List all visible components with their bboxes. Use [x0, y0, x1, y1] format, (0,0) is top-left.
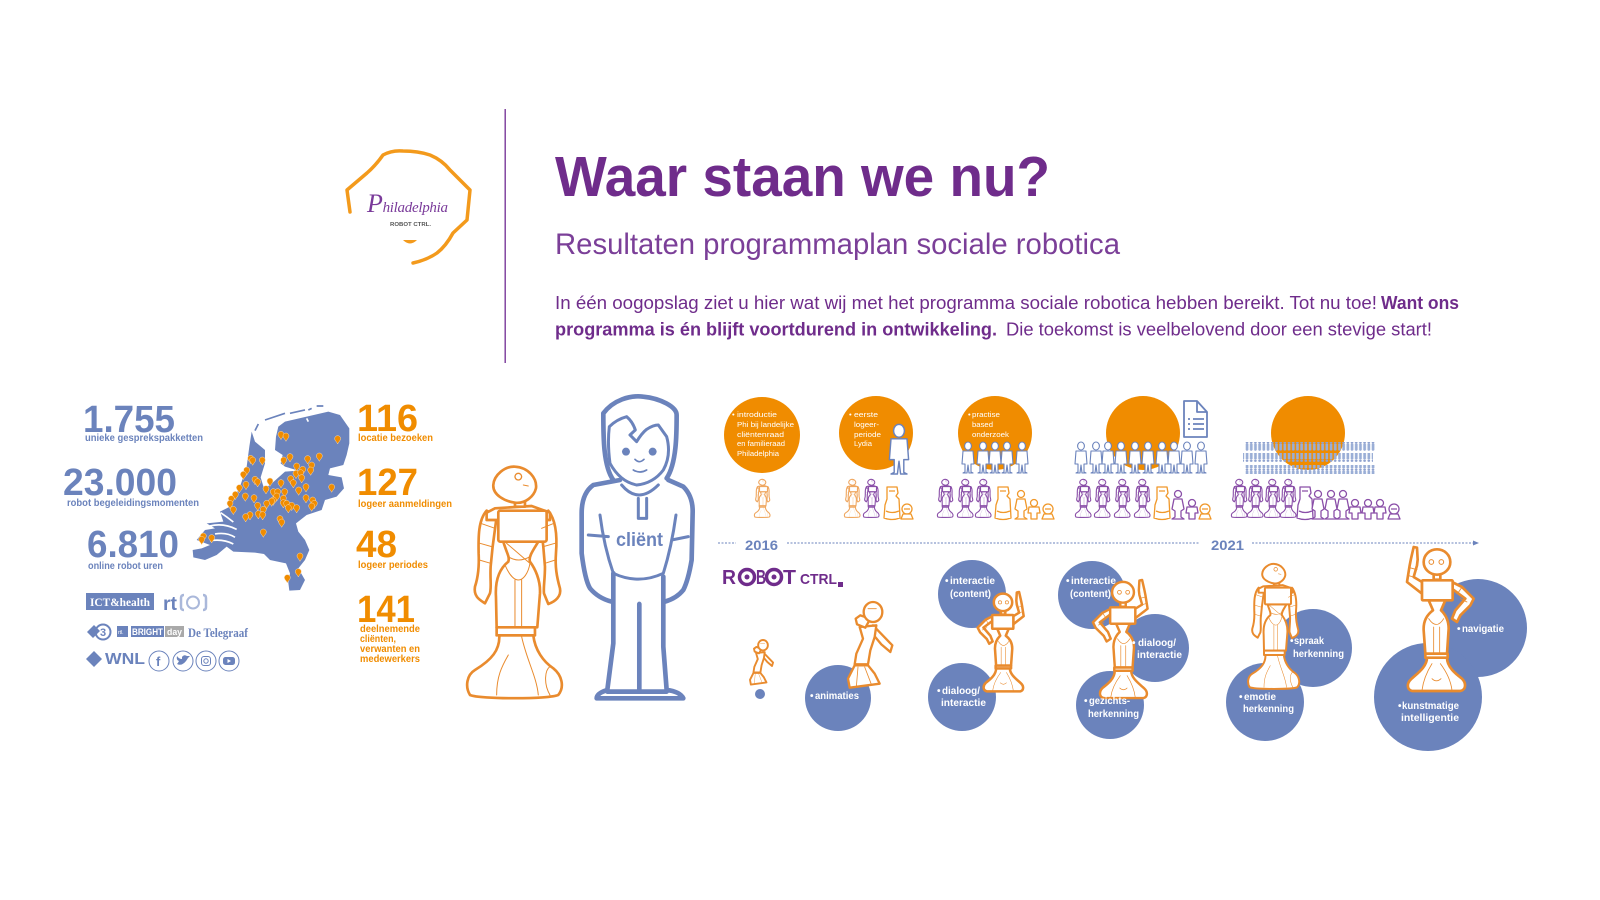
capability stage 5: navigatie en kunstmatige intelligentie: intelligentie: [1401, 713, 1459, 724]
top row: milestone 3: •: [968, 410, 971, 419]
media logos: De Telegraaf: [188, 625, 249, 640]
stats: right orange: cliënten,: [360, 634, 396, 645]
capability stage 3: interactie, dialoog, gezichtsherkenning: (content): [1070, 589, 1111, 600]
logo: Philadelphia Robot Ctrl: Philadelphia: [366, 189, 448, 218]
top row: milestone 1: introductie: [737, 410, 777, 419]
capability stage 4: spraak en emotie herkenning: spraak: [1294, 636, 1324, 647]
label: client: cliënt: [616, 530, 664, 551]
stats: left blue: [63, 399, 203, 572]
logo: Robot Ctrl: B: [756, 567, 766, 589]
top row: milestone 1: cliëntenraad: [737, 430, 784, 439]
logo: Philadelphia Robot Ctrl: ROBOT CTRL.: [390, 222, 431, 228]
capability stage 4: spraak en emotie herkenning: •: [1239, 692, 1243, 703]
icon: document: [1184, 401, 1207, 437]
intro paragraph: [555, 293, 1459, 340]
capability stage 3: interactie, dialoog, gezichtsherkenning: [1058, 561, 1189, 739]
capability stage 3: interactie, dialoog, gezichtsherkenning: •: [1066, 576, 1070, 587]
media logos: BRIGHT: [132, 627, 163, 637]
capability stage 5: navigatie en kunstmatige intelligentie: navigatie: [1462, 624, 1504, 635]
logo: Robot Ctrl: R: [722, 567, 737, 589]
logo: Robot Ctrl: CTRL: [800, 571, 837, 588]
capability stage 3: interactie, dialoog, gezichtsherkenning: herkenning: [1088, 709, 1139, 720]
stats: left blue: 6.810: [87, 524, 179, 566]
capability stage 5: navigatie en kunstmatige intelligentie: •: [1398, 701, 1402, 712]
stats: left blue: 23.000: [63, 462, 177, 504]
logo: Robot Ctrl: T: [783, 567, 796, 589]
top row: milestone 2: [839, 396, 913, 520]
media logos: day: [167, 627, 182, 637]
top row: milestone 3: practise: [972, 410, 1000, 419]
top row: milestone 1: [724, 397, 800, 517]
top row: milestone 1: Philadelphia: [737, 449, 780, 458]
intro paragraph: Die toekomst is veelbelovend door een stevige start!: [1006, 320, 1432, 340]
media logos: ICT&health: [90, 595, 150, 609]
capability stage 1: animaties: •: [810, 691, 814, 702]
title: Waar staan we nu?: [555, 145, 1050, 209]
stats: right orange: medewerkers: [360, 654, 420, 665]
capability stage 4: spraak en emotie herkenning: herkenning: [1293, 649, 1344, 660]
intro paragraph: In één oogopslag ziet u hier wat wij met het programma sociale robotica hebben bereikt. Tot nu toe!: [555, 293, 1377, 313]
stats: right orange: [356, 398, 452, 665]
capability stage 2: interactie and dialoog: interactie: [941, 698, 986, 709]
media logos: f: [156, 654, 161, 669]
capability stage 2: interactie and dialoog: •: [945, 576, 949, 587]
stats: right orange: 48: [356, 524, 397, 566]
top row: milestone 2: logeer-: [854, 420, 879, 429]
subtitle: Resultaten programmaplan sociale robotica: [555, 228, 1120, 261]
timeline arrow 2016 to 2021: 2021: [1211, 537, 1244, 553]
timeline arrow 2016 to 2021: [718, 537, 1479, 553]
top row: milestone 2: periode: [854, 430, 881, 439]
top row: milestone 5: [1231, 396, 1400, 520]
capability stage 5: navigatie en kunstmatige intelligentie: [1374, 547, 1527, 751]
capability stage 3: interactie, dialoog, gezichtsherkenning: •: [1084, 696, 1088, 707]
top row: milestone 2: eerste: [854, 410, 878, 419]
stats: right orange: deelnemende: [360, 624, 420, 635]
stats: right orange: 127: [357, 462, 418, 504]
media logos: 3: [100, 627, 106, 639]
capability stage 1: animaties: animaties: [815, 691, 859, 702]
media logos: [86, 593, 249, 671]
stats: right orange: 116: [357, 398, 418, 440]
top row: milestone 3: [937, 396, 1054, 520]
map of the Netherlands with location pins: [193, 406, 349, 591]
capability stage 3: interactie, dialoog, gezichtsherkenning: interactie: [1071, 576, 1116, 587]
capability stage 2: interactie and dialoog: (content): [950, 589, 991, 600]
stats: left blue: online robot uren: [88, 561, 163, 572]
capability stage 1: animaties: [805, 602, 892, 731]
capability stage 5: navigatie en kunstmatige intelligentie: kunstmatige: [1402, 701, 1459, 712]
capability stage 4: spraak en emotie herkenning: •: [1290, 636, 1294, 647]
capability stage 2: interactie and dialoog: dialoog/: [942, 686, 980, 697]
top row: milestone 1: en familieraad: [737, 439, 785, 448]
stats: right orange: logeer aanmeldingen: [358, 499, 452, 510]
vertical divider: [504, 109, 506, 363]
capability stage 2: interactie and dialoog: [928, 560, 1024, 731]
top row: milestone 4: [1075, 396, 1211, 520]
capability stage 3: interactie, dialoog, gezichtsherkenning: interactie: [1137, 650, 1182, 661]
capability stage 3: interactie, dialoog, gezichtsherkenning: gezichts-: [1089, 696, 1130, 707]
media logos: rtl.: [118, 630, 124, 636]
media logos: WNL: [105, 651, 145, 668]
capability stage 2: interactie and dialoog: interactie: [950, 576, 995, 587]
capability stage 4: spraak en emotie herkenning: emotie: [1244, 692, 1276, 703]
top row: milestone 1: Phi bij landelijke: [737, 420, 794, 429]
capability stage 5: navigatie en kunstmatige intelligentie: •: [1457, 624, 1461, 635]
timeline arrow 2016 to 2021: 2016: [745, 537, 778, 553]
stats: right orange: verwanten en: [360, 644, 420, 655]
logo: Robot Ctrl: [722, 567, 843, 589]
top row: milestone 3: onderzoek: [972, 430, 1009, 439]
intro paragraph: Want ons: [1381, 293, 1459, 313]
capability stage 0: [750, 640, 773, 699]
stats: left blue: unieke gesprekspakketten: [85, 433, 203, 444]
stats: right orange: locatie bezoeken: [358, 433, 433, 444]
stats: left blue: 1.755: [83, 399, 175, 441]
capability stage 3: interactie, dialoog, gezichtsherkenning: dialoog/: [1138, 638, 1176, 649]
stats: left blue: robot begeleidingsmomenten: [67, 498, 199, 509]
logo: Philadelphia Robot Ctrl: [347, 151, 470, 263]
top row: milestone 1: •: [732, 410, 735, 419]
top row: milestone 3: based: [972, 420, 993, 429]
capability stage 4: spraak en emotie herkenning: herkenning: [1243, 704, 1294, 715]
top row: milestone 2: •: [849, 410, 852, 419]
media logos: rt: [163, 594, 178, 615]
stats: right orange: logeer periodes: [358, 560, 428, 571]
capability stage 4: spraak en emotie herkenning: [1226, 564, 1352, 741]
intro paragraph: programma is én blijft voortdurend in ontwikkeling.: [555, 320, 997, 340]
top row: milestone 2: Lydia: [854, 439, 873, 448]
capability stage 2: interactie and dialoog: •: [937, 686, 941, 697]
client figure: [582, 396, 693, 698]
capability stage 3: interactie, dialoog, gezichtsherkenning: •: [1132, 638, 1136, 649]
large robot: [467, 467, 562, 698]
stats: right orange: 141: [357, 589, 415, 631]
